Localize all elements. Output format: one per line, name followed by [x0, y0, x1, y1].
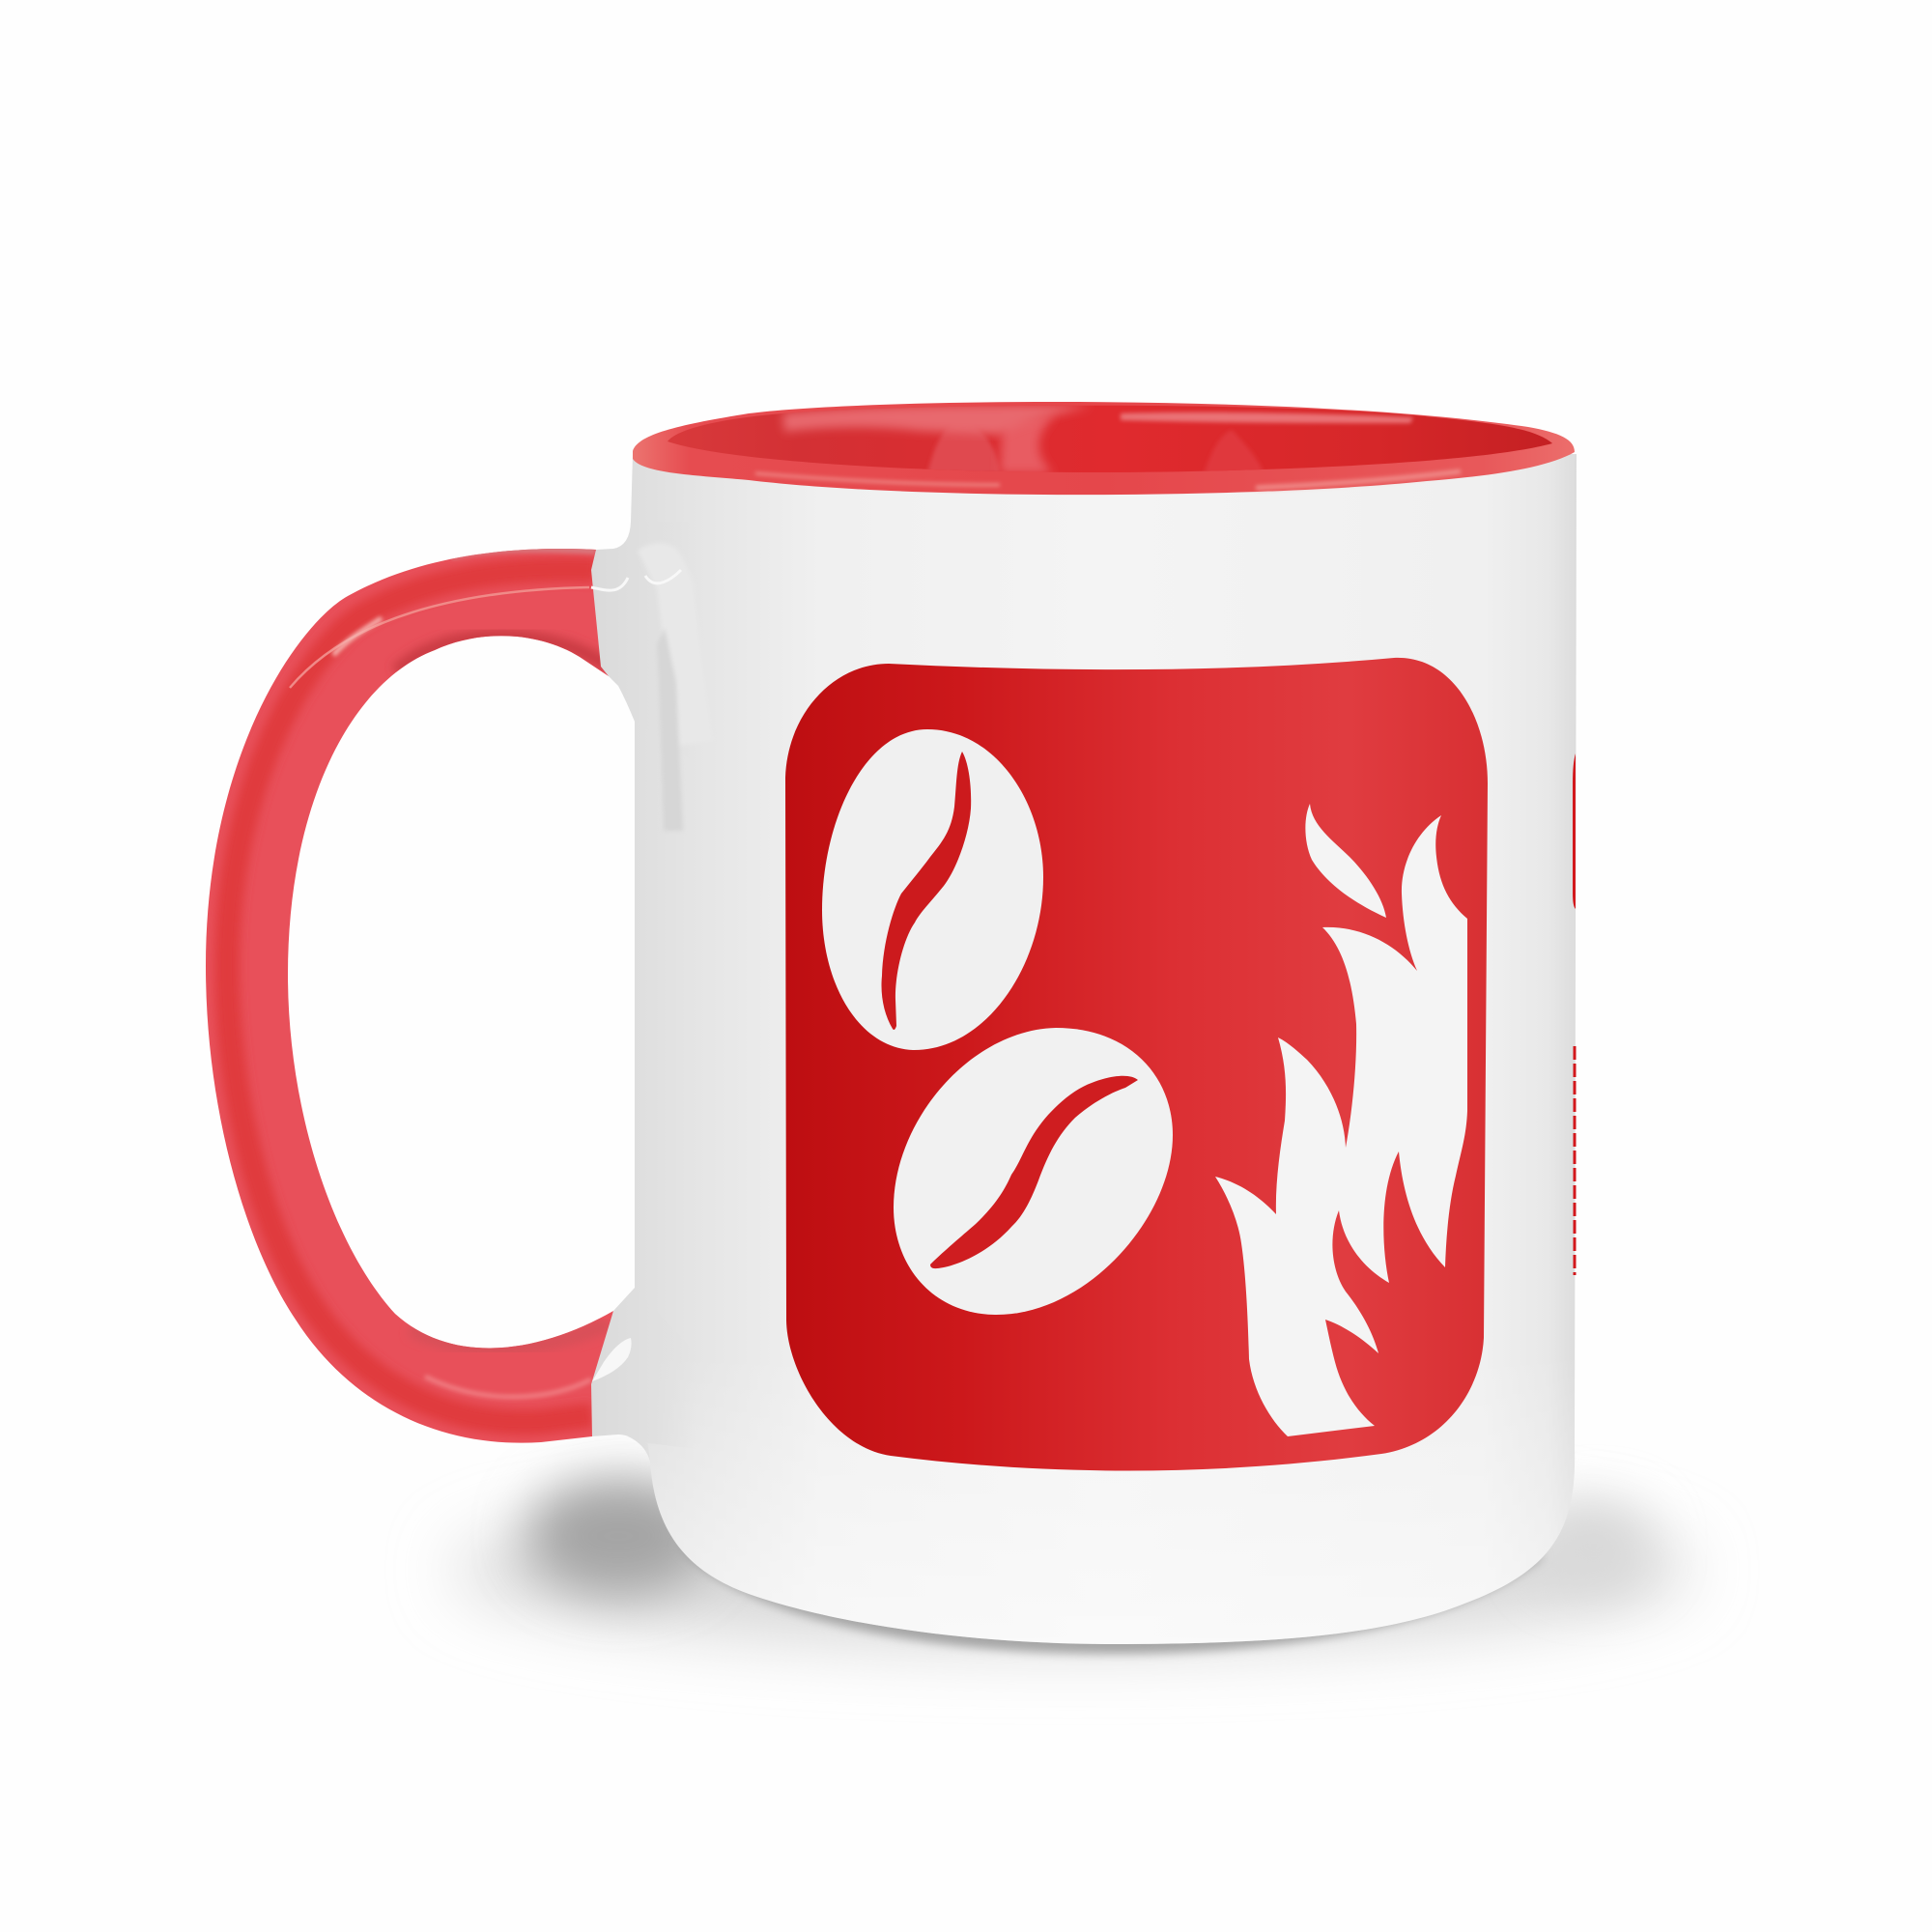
- wrapped print edge on right side of mug: [1573, 753, 1576, 1275]
- handle inner top shade: [396, 637, 609, 671]
- lower handle joint: [591, 1288, 696, 1449]
- handle shading band: [227, 569, 596, 1423]
- handle lower inner shade: [411, 1323, 609, 1348]
- printed logo: rounded red square: [785, 658, 1488, 1471]
- red interior: [668, 406, 1552, 472]
- mug handle: [206, 548, 613, 1443]
- outer rim sheen: [755, 473, 1000, 485]
- cast shadow: [454, 1478, 1690, 1654]
- interior reflections: [927, 429, 999, 471]
- mug body: [591, 454, 1577, 1644]
- handle lower highlight: [425, 1377, 591, 1397]
- handle top edge sheen: [451, 548, 596, 555]
- upper handle joint: [591, 522, 712, 831]
- mug product illustration: [206, 402, 1695, 1673]
- icon: flames: [1215, 804, 1467, 1436]
- handle upper highlight: [290, 587, 589, 688]
- icon: coffee bean upper: [822, 729, 1043, 1050]
- mug rim and red interior: [633, 402, 1575, 495]
- icon: coffee bean lower: [894, 1028, 1173, 1315]
